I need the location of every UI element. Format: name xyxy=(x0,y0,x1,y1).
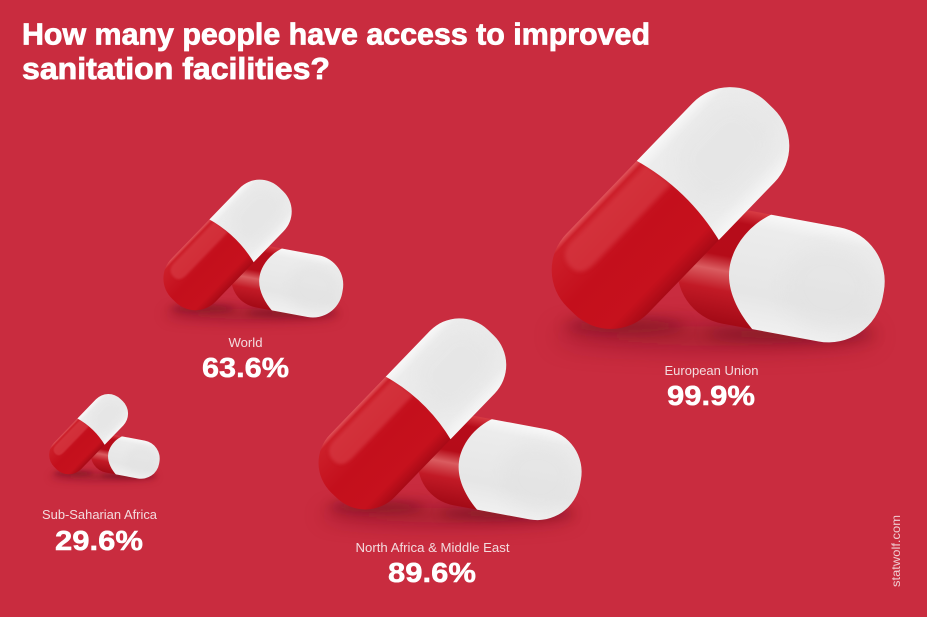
value: Sub-Saharian Africa: 29.6% xyxy=(55,525,143,556)
label: European Union: European Union xyxy=(664,364,759,378)
value: European Union: 99.9% xyxy=(667,380,755,411)
icon: pills, European Union xyxy=(529,61,900,355)
panel: European Union xyxy=(529,61,900,411)
icon: pills, North Africa and Middle East xyxy=(300,298,594,530)
title: How many people have access to improved xyxy=(22,16,650,52)
label: World: World xyxy=(228,336,263,350)
icon: pills, World xyxy=(151,166,352,324)
panel: World xyxy=(151,166,352,383)
panel: North Africa and Middle East xyxy=(300,298,594,588)
icon: pills, Sub-Saharian Africa xyxy=(42,385,165,483)
credit: statwolf.com: statwolf.com xyxy=(889,515,903,587)
value: North Africa and Middle East: 89.6% xyxy=(388,557,476,588)
value: World: 63.6% xyxy=(202,352,289,383)
title: sanitation facilities? xyxy=(22,51,330,86)
label: North Africa and Middle East: North Africa & Middle East xyxy=(356,541,510,555)
panel: Sub-Saharian Africa xyxy=(42,385,165,556)
label: Sub-Saharian Africa: Sub-Saharian Africa xyxy=(42,508,157,522)
